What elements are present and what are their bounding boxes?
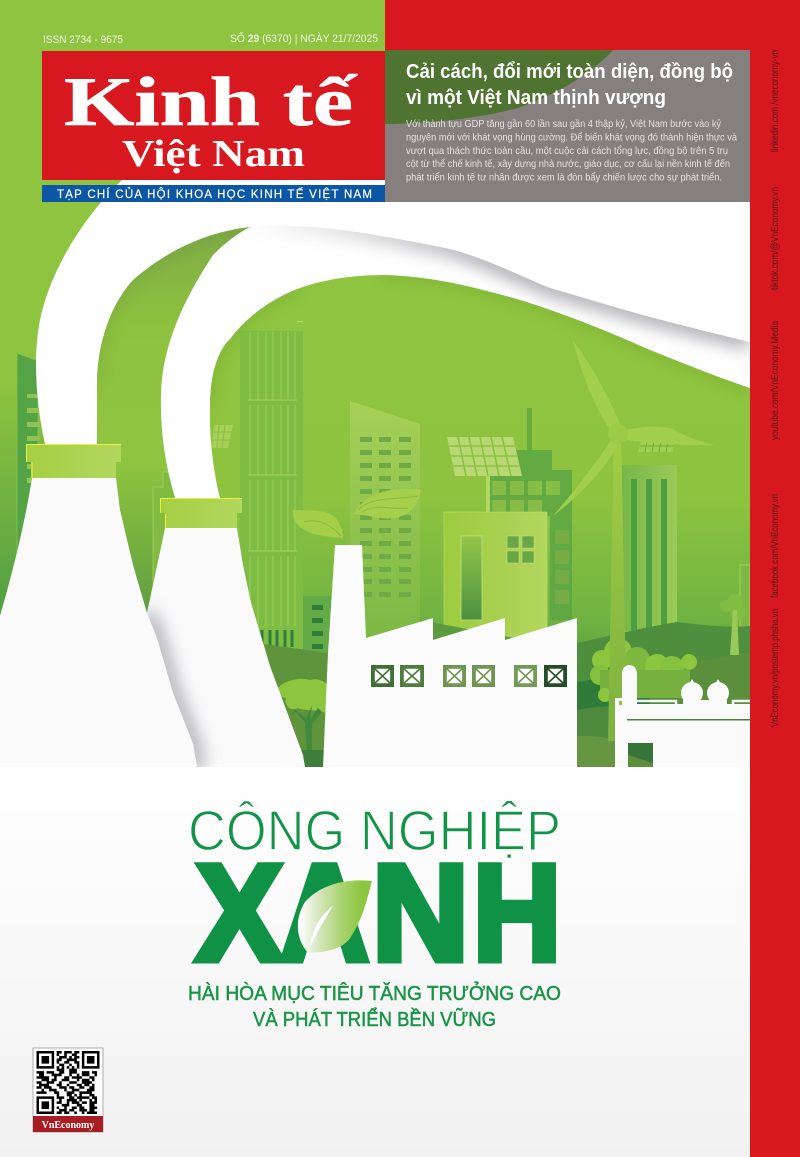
leaf on title bbox=[298, 880, 372, 953]
refinery door bbox=[628, 743, 653, 767]
leaf left bbox=[293, 510, 343, 538]
social links on right strip: tiktok.com/@VnEconomy.vn bbox=[770, 187, 781, 290]
top green band bbox=[0, 0, 385, 51]
lead headline: Cải cách, đổi mới toàn diện, đồng bộ bbox=[406, 60, 733, 83]
band shadow on white sheet bbox=[250, 223, 750, 339]
cover title XANH: H bbox=[473, 837, 561, 990]
dark green corner bbox=[385, 50, 613, 124]
cover title line one: CÔNG NGHIỆP bbox=[188, 799, 561, 863]
lead headline: vì một Việt Nam thịnh vượng bbox=[406, 86, 666, 109]
right bushes bbox=[590, 638, 697, 702]
right striped building bbox=[622, 465, 677, 632]
factory silhouette bbox=[323, 545, 577, 767]
cover title XANH: X bbox=[196, 837, 283, 990]
social links on right strip: linkedin.com /vneconomy-vn bbox=[770, 50, 781, 152]
lead body text: nguyên mới với khát vọng hùng cường. Để biến khát vọng đó thành hiện thực và bbox=[406, 132, 737, 144]
white paper sheet bbox=[0, 180, 750, 767]
logo main title: Kinh tế bbox=[64, 64, 358, 141]
scene background bbox=[210, 275, 750, 672]
tower two shadow bbox=[147, 613, 197, 770]
hills bbox=[264, 620, 750, 770]
refinery silhouette bbox=[615, 665, 750, 767]
second green paper layer bbox=[97, 227, 250, 612]
storage tanks bbox=[681, 679, 729, 706]
tagline bar bbox=[42, 185, 385, 202]
inner shadow bbox=[98, 286, 128, 369]
dark grid building bbox=[490, 408, 572, 620]
QR brand footer bbox=[33, 1116, 103, 1132]
large solar panel bbox=[447, 437, 522, 516]
top red band bbox=[385, 0, 800, 50]
cover subtitle: VÀ PHÁT TRIỂN BỀN VỮNG bbox=[253, 1007, 496, 1031]
refinery dark line bbox=[627, 719, 750, 720]
tagline bar: TẠP CHÍ CỦA HỘI KHOA HỌC KINH TẾ VIỆT NAM bbox=[57, 188, 372, 201]
small roof solar panel bbox=[638, 442, 674, 452]
ISSN label: ISSN 2734 - 9675 bbox=[43, 34, 123, 46]
wind turbine bbox=[553, 341, 715, 741]
cover title XANH bbox=[196, 836, 561, 990]
issue and date: SỐ 29 (6370) | NGÀY 21/7/2025 bbox=[230, 31, 378, 45]
left green paper layer bbox=[0, 50, 130, 620]
building outline behind tower bbox=[152, 472, 175, 587]
masthead logo red panel bbox=[42, 51, 385, 180]
lead body text: phát triển kinh tế tư nhân được xem là đòn bẩy chiến lược cho sự phát triển. bbox=[406, 172, 722, 184]
left tree bbox=[278, 679, 330, 770]
leaf right bbox=[354, 489, 421, 518]
factory windows bbox=[371, 665, 567, 687]
refinery railings bbox=[637, 701, 750, 705]
top inner shadow bbox=[210, 276, 743, 392]
right tree bbox=[720, 594, 740, 655]
tower one cap bbox=[26, 444, 121, 478]
lower left building bbox=[303, 596, 332, 649]
middle building bbox=[444, 512, 547, 642]
cooling tower two bbox=[140, 498, 305, 770]
lead body text: Với thành tựu GDP tăng gần 60 lần sau gần 4 thập kỷ, Việt Nam bước vào kỷ bbox=[406, 118, 721, 130]
social links on right strip bbox=[770, 50, 781, 727]
cover title XANH: N bbox=[372, 836, 469, 989]
tower two cap bbox=[160, 498, 242, 528]
cover subtitle: HÀI HÒA MỤC TIÊU TĂNG TRƯỞNG CAO bbox=[188, 981, 561, 1005]
lead headline bbox=[406, 60, 733, 109]
social links on right strip: youtube.com/VnEconomy.Media bbox=[770, 321, 781, 440]
small solar panel bbox=[212, 425, 233, 448]
lead body text: vượt qua thách thức toàn cầu, một cuộc cải cách tổng lực, đồng bộ trên 5 trụ bbox=[406, 145, 728, 157]
cover title XANH: A bbox=[280, 836, 369, 989]
lead story panel bbox=[385, 50, 750, 202]
logo subtitle: Việt Nam bbox=[122, 133, 305, 175]
social links on right strip: facebook.com/VnEconomy.vn bbox=[770, 494, 781, 598]
lead body text: cột từ thể chế kinh tế, xây dựng nhà nước, giáo dục, cơ cấu lại nền kinh tế đến bbox=[406, 158, 730, 170]
QR code: VnEconomy bbox=[42, 1120, 94, 1131]
QR code bbox=[33, 1048, 103, 1132]
tall striped building bbox=[240, 321, 303, 651]
lead body text bbox=[406, 118, 737, 184]
QR modules bbox=[36, 1052, 98, 1113]
cooling tower one bbox=[0, 444, 197, 767]
social links on right strip: VnEconomy.vn/postemp.phsha.vn bbox=[770, 609, 781, 727]
cover subtitle bbox=[188, 981, 561, 1031]
left building bbox=[16, 352, 40, 554]
right red strip bbox=[750, 0, 800, 1157]
tall building with windows bbox=[350, 401, 420, 640]
small right building bbox=[740, 564, 750, 627]
green city scene bbox=[200, 270, 750, 770]
